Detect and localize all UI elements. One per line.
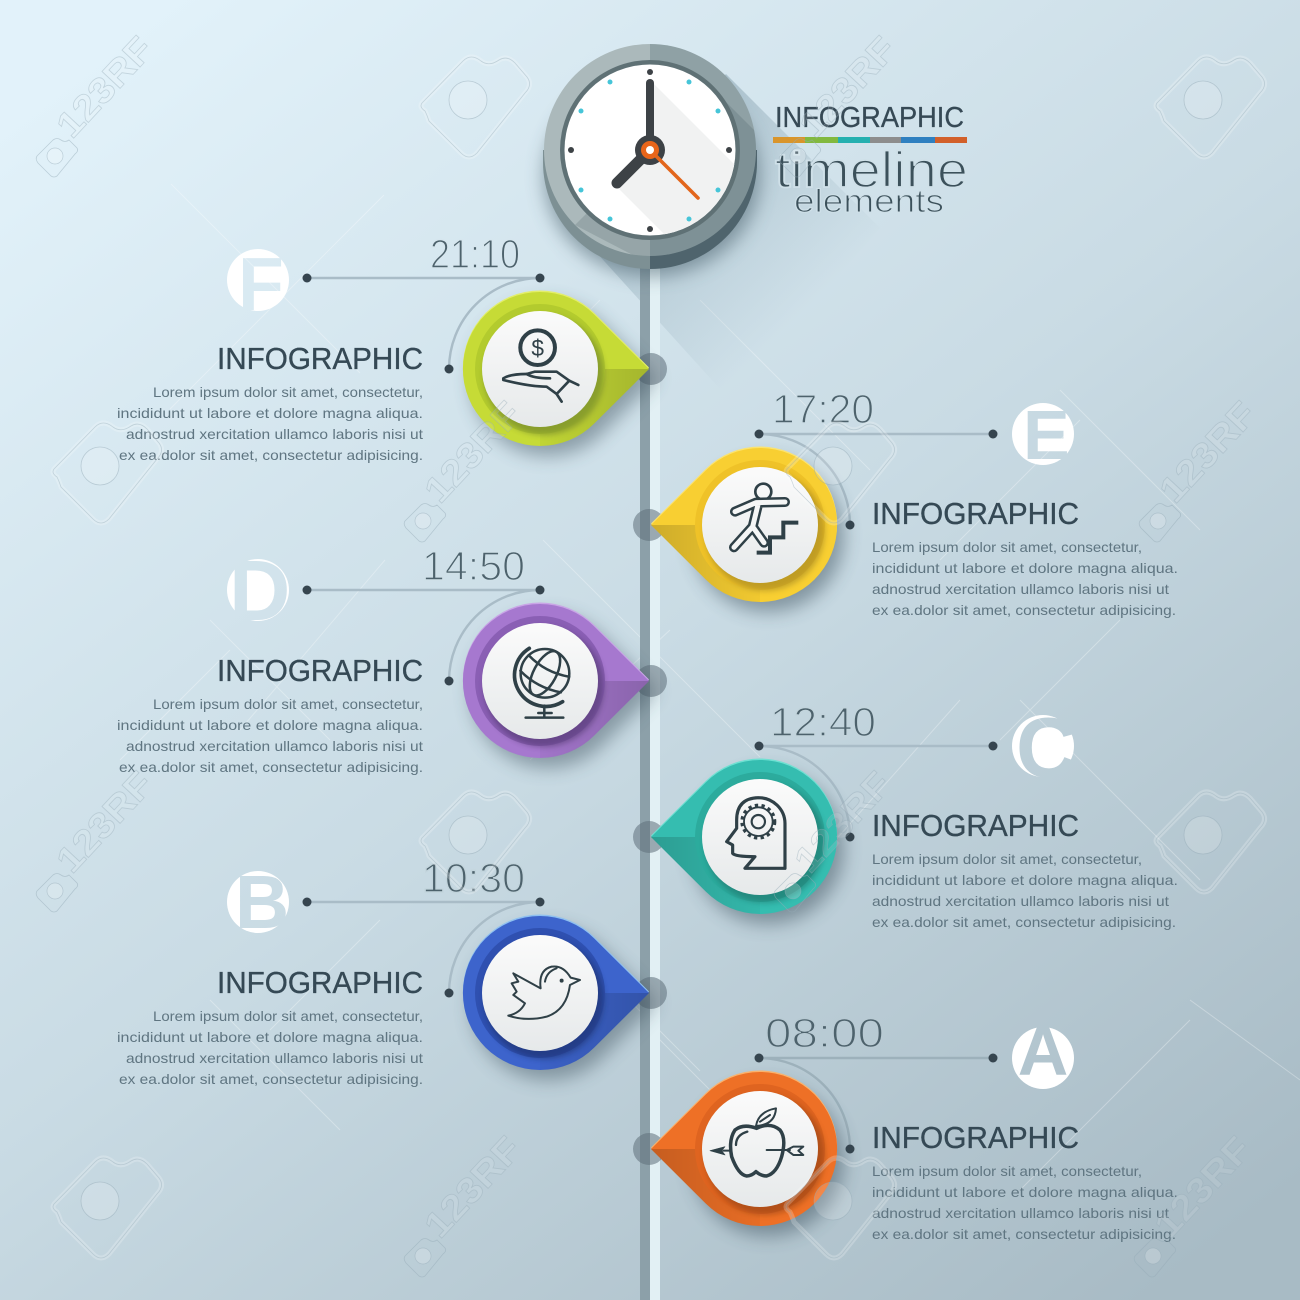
letter F badge — [227, 249, 289, 311]
step A — [633, 1010, 1178, 1242]
clock — [534, 44, 770, 288]
title block — [773, 102, 968, 219]
body text: incididunt ut labore et dolore magna aliqua. — [872, 560, 1178, 576]
purple pin — [463, 602, 657, 768]
title: infographic: INFOGRAPHIC — [775, 102, 964, 134]
watermarks: 123RF — [1146, 1128, 1259, 1245]
heading: INFOGRAPHIC — [872, 496, 1079, 531]
body text: Lorem ipsum dolor sit amet, consectetur, — [153, 1008, 423, 1024]
body text: Lorem ipsum dolor sit amet, consectetur, — [153, 696, 423, 712]
body text: incididunt ut labore et dolore magna aliqua. — [117, 717, 423, 733]
connector lines — [302, 586, 544, 686]
body text: adnostrud xercitation ullamco laboris nisi ut — [126, 1050, 423, 1066]
icon: runner on stairs — [734, 484, 798, 553]
timeline node — [633, 821, 665, 853]
watermarks: 123RF — [786, 763, 899, 880]
icon: coin in hand: $ — [531, 335, 544, 361]
icon: globe — [513, 641, 577, 718]
orange pin — [651, 1070, 844, 1236]
time 12:40: 12:40 — [770, 699, 876, 745]
watermarks: 123RF — [791, 28, 904, 145]
title: elements: elements — [794, 183, 944, 219]
watermarks: 123RF — [416, 1128, 529, 1245]
body text: Lorem ipsum dolor sit amet, consectetur, — [872, 539, 1142, 555]
heading: INFOGRAPHIC — [872, 1120, 1079, 1155]
body text — [117, 384, 423, 463]
icon: head with gear — [727, 798, 785, 868]
letter D badge — [227, 559, 289, 621]
watermarks: 123RF — [416, 393, 529, 510]
yellow pin — [651, 446, 844, 612]
body text: adnostrud xercitation ullamco laboris nisi ut — [872, 581, 1169, 597]
body text: incididunt ut labore et dolore magna aliqua. — [117, 405, 423, 421]
body text — [872, 539, 1178, 618]
teal pin — [651, 758, 844, 924]
step C — [633, 699, 1178, 930]
clock hands — [617, 83, 698, 198]
icon: bird — [508, 966, 580, 1019]
connector lines — [302, 274, 544, 374]
clock face — [564, 64, 736, 236]
timeline node — [635, 353, 667, 385]
body text: Lorem ipsum dolor sit amet, consectetur, — [872, 851, 1142, 867]
step D — [117, 543, 667, 775]
heading: INFOGRAPHIC — [872, 808, 1079, 843]
body text: ex ea.dolor sit amet, consectetur adipisicing. — [119, 1071, 423, 1087]
time 10:30: 10:30 — [422, 855, 525, 901]
step E — [633, 386, 1178, 618]
title: timeline: timeline — [775, 142, 968, 198]
long shadow of clock — [576, 74, 880, 400]
body text: adnostrud xercitation ullamco laboris nisi ut — [126, 738, 423, 754]
timeline node — [635, 977, 667, 1009]
watermarks: 123RF — [48, 28, 161, 145]
body text: ex ea.dolor sit amet, consectetur adipisicing. — [119, 447, 423, 463]
body text — [872, 1163, 1178, 1242]
body text: incididunt ut labore et dolore magna aliqua. — [872, 872, 1178, 888]
icon: coin in hand — [503, 330, 578, 402]
body text — [117, 1008, 423, 1087]
clock bezel — [544, 44, 650, 256]
letter A badge — [1012, 1027, 1074, 1089]
timeline node — [635, 665, 667, 697]
body text: ex ea.dolor sit amet, consectetur adipisicing. — [872, 1226, 1176, 1242]
body text: ex ea.dolor sit amet, consectetur adipisicing. — [872, 602, 1176, 618]
step F — [117, 231, 667, 463]
body text: adnostrud xercitation ullamco laboris nisi ut — [872, 1205, 1169, 1221]
body text — [872, 851, 1178, 930]
clock ticks — [568, 69, 732, 232]
connector lines — [302, 898, 544, 998]
body text: adnostrud xercitation ullamco laboris nisi ut — [126, 426, 423, 442]
blue pin — [463, 914, 657, 1080]
green pin — [463, 290, 657, 456]
letter C badge — [1012, 715, 1074, 777]
body text: ex ea.dolor sit amet, consectetur adipisicing. — [119, 759, 423, 775]
time 21:10: 21:10 — [430, 231, 520, 277]
clock body — [543, 150, 650, 269]
body text: incididunt ut labore et dolore magna aliqua. — [117, 1029, 423, 1045]
body text: ex ea.dolor sit amet, consectetur adipisicing. — [872, 914, 1176, 930]
body text — [117, 696, 423, 775]
connector lines — [754, 430, 998, 530]
body text: adnostrud xercitation ullamco laboris nisi ut — [872, 893, 1169, 909]
heading: INFOGRAPHIC — [217, 653, 423, 688]
body text: incididunt ut labore et dolore magna aliqua. — [872, 1184, 1178, 1200]
watermarks: 123RF — [48, 763, 161, 880]
title colour bar — [773, 137, 967, 143]
connector lines — [754, 1054, 998, 1154]
step B — [117, 855, 667, 1087]
heading: INFOGRAPHIC — [217, 965, 423, 1000]
timeline node — [633, 1133, 665, 1165]
letter B badge — [227, 871, 289, 933]
time 14:50: 14:50 — [422, 543, 525, 589]
timeline vertical bar — [640, 255, 660, 1300]
body text: Lorem ipsum dolor sit amet, consectetur, — [153, 384, 423, 400]
watermarks: 123RF — [1151, 393, 1264, 510]
heading: INFOGRAPHIC — [217, 341, 423, 376]
time 17:20: 17:20 — [772, 386, 874, 432]
time 08:00: 08:00 — [765, 1010, 884, 1056]
body text: Lorem ipsum dolor sit amet, consectetur, — [872, 1163, 1142, 1179]
timeline node — [633, 509, 665, 541]
connector lines — [754, 742, 998, 842]
icon: apple with arrow — [710, 1108, 803, 1176]
letter E badge — [1012, 403, 1074, 465]
